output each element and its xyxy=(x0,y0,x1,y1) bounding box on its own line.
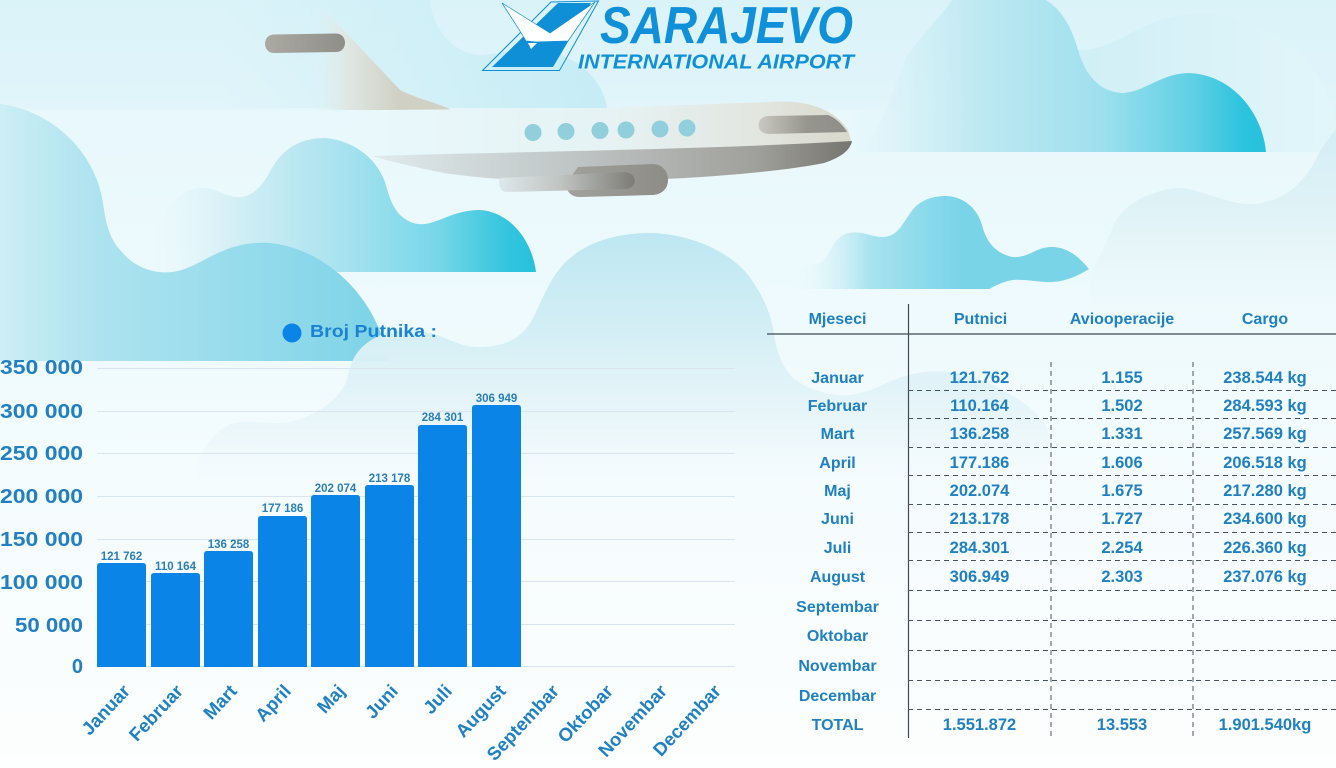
column: passengers: 202.074 xyxy=(950,482,1010,500)
y axis labels: 250 000 xyxy=(0,443,83,465)
table header: Putnici xyxy=(954,311,1007,328)
x axis labels: Decembar xyxy=(649,680,725,760)
column: cargo: 1.901.540kg xyxy=(1219,716,1311,734)
column: months: Oktobar xyxy=(807,628,868,645)
cloud: left middle back xyxy=(140,138,536,272)
column: flight operations: 2.254 xyxy=(1101,539,1143,557)
cloud: top right backdrop xyxy=(1074,14,1336,152)
cloud: centre pale xyxy=(195,233,1052,500)
column: months: April xyxy=(819,455,856,472)
column: passengers: 177.186 xyxy=(950,454,1009,472)
column: months: Januar xyxy=(811,370,864,387)
bar value labels: 202 074 xyxy=(315,483,357,495)
bar value labels: 177 186 xyxy=(262,503,303,515)
bar value labels: 213 178 xyxy=(369,473,411,485)
column: flight operations: 1.331 xyxy=(1101,425,1143,443)
logo mark xyxy=(482,1,598,70)
plane engine xyxy=(566,164,668,197)
column: cargo: 238.544 kg xyxy=(1223,369,1307,387)
bar value labels: 121 762 xyxy=(101,551,142,563)
column: months: August xyxy=(810,569,866,586)
cloud: right pale xyxy=(1090,130,1336,330)
engine pylon xyxy=(499,172,635,192)
column: cargo: 226.360 kg xyxy=(1223,539,1307,557)
y axis labels: 350 000 xyxy=(0,357,83,379)
column: cargo xyxy=(1219,369,1311,734)
column: months: Juli xyxy=(824,540,851,557)
x axis labels: Novembar xyxy=(594,680,671,761)
column: cargo: 257.569 kg xyxy=(1223,425,1307,443)
column: passengers: 284.301 xyxy=(950,539,1009,557)
y axis labels: 0 xyxy=(72,656,83,678)
column: months: Februar xyxy=(808,398,867,415)
plane belly xyxy=(372,141,852,181)
column: passengers xyxy=(943,369,1016,734)
bar value labels: 284 301 xyxy=(422,412,464,424)
chart legend: Broj Putnika : xyxy=(310,321,437,341)
x axis labels: August xyxy=(451,680,510,741)
column: flight operations: 1.606 xyxy=(1101,454,1143,472)
tail stripe xyxy=(265,34,345,53)
x axis labels: Maj xyxy=(313,680,349,717)
airplane xyxy=(265,3,852,197)
column: cargo: 234.600 kg xyxy=(1223,510,1307,528)
plane windows xyxy=(524,120,696,141)
y axis labels xyxy=(0,357,83,678)
column: months: Juni xyxy=(821,511,854,528)
column: flight operations: 13.553 xyxy=(1097,716,1147,734)
cloud: right small xyxy=(795,196,1089,289)
column: cargo: 284.593 kg xyxy=(1223,397,1307,415)
cloud: left large xyxy=(0,104,389,361)
column: flight operations: 2.303 xyxy=(1101,568,1143,586)
column: passengers: 213.178 xyxy=(950,510,1009,528)
logo: Sarajevo International Airport xyxy=(482,0,856,74)
table header: Cargo xyxy=(1242,311,1288,328)
bar chart: Broj Putnika xyxy=(0,321,735,765)
column: cargo: 217.280 kg xyxy=(1223,482,1307,500)
column: passengers: 110.164 xyxy=(950,397,1010,415)
x axis labels: Oktobar xyxy=(553,680,617,747)
column: passengers: 121.762 xyxy=(950,369,1009,387)
column: months: Mart xyxy=(821,426,855,443)
x axis labels: Juni xyxy=(361,680,402,723)
column: cargo: 206.518 kg xyxy=(1223,454,1307,472)
cloud: top centre xyxy=(220,0,607,108)
cloud: top right xyxy=(860,0,1266,152)
plane tail xyxy=(312,3,452,110)
y axis labels: 50 000 xyxy=(15,615,83,637)
column: months: Novembar xyxy=(798,658,877,675)
column: months: Decembar xyxy=(799,688,876,705)
y axis labels: 300 000 xyxy=(0,401,83,423)
table header xyxy=(809,311,1288,328)
column: passengers: 1.551.872 xyxy=(943,716,1016,734)
x axis labels: Juli xyxy=(419,680,456,718)
column: passengers: 136.258 xyxy=(950,425,1009,443)
column: flight operations: 1.727 xyxy=(1101,510,1143,528)
x axis labels: Mart xyxy=(199,680,241,723)
x axis labels: Januar xyxy=(77,680,134,739)
bar value labels xyxy=(101,393,517,573)
data table xyxy=(767,304,1336,738)
column: months: Maj xyxy=(824,483,851,500)
column: months: Septembar xyxy=(796,599,879,616)
column: passengers: 306.949 xyxy=(950,568,1009,586)
x axis labels xyxy=(77,680,725,765)
plane fuselage xyxy=(340,102,852,157)
bar value labels: 110 164 xyxy=(155,561,197,573)
cockpit window xyxy=(758,115,847,134)
x axis labels: April xyxy=(251,680,295,726)
x axis labels: Februar xyxy=(125,680,187,745)
y axis labels: 200 000 xyxy=(0,486,83,508)
column: flight operations: 1.502 xyxy=(1101,397,1143,415)
column: cargo: 237.076 kg xyxy=(1223,568,1307,586)
y axis labels: 150 000 xyxy=(0,529,83,551)
table header: Aviooperacije xyxy=(1070,311,1174,328)
column: flight operations: 1.675 xyxy=(1101,482,1143,500)
tagline: INTERNATIONAL AIRPORT xyxy=(578,50,856,74)
chart legend xyxy=(282,321,437,342)
x axis labels: Septembar xyxy=(482,680,563,765)
column: flight operations xyxy=(1097,369,1147,734)
bars xyxy=(97,405,521,667)
column: months xyxy=(796,370,879,734)
bar value labels: 136 258 xyxy=(208,539,250,551)
column: flight operations: 1.155 xyxy=(1101,369,1143,387)
table header: Mjeseci xyxy=(809,311,866,328)
column: months: TOTAL xyxy=(812,717,864,734)
bar value labels: 306 949 xyxy=(476,393,517,405)
y axis labels: 100 000 xyxy=(0,572,83,594)
